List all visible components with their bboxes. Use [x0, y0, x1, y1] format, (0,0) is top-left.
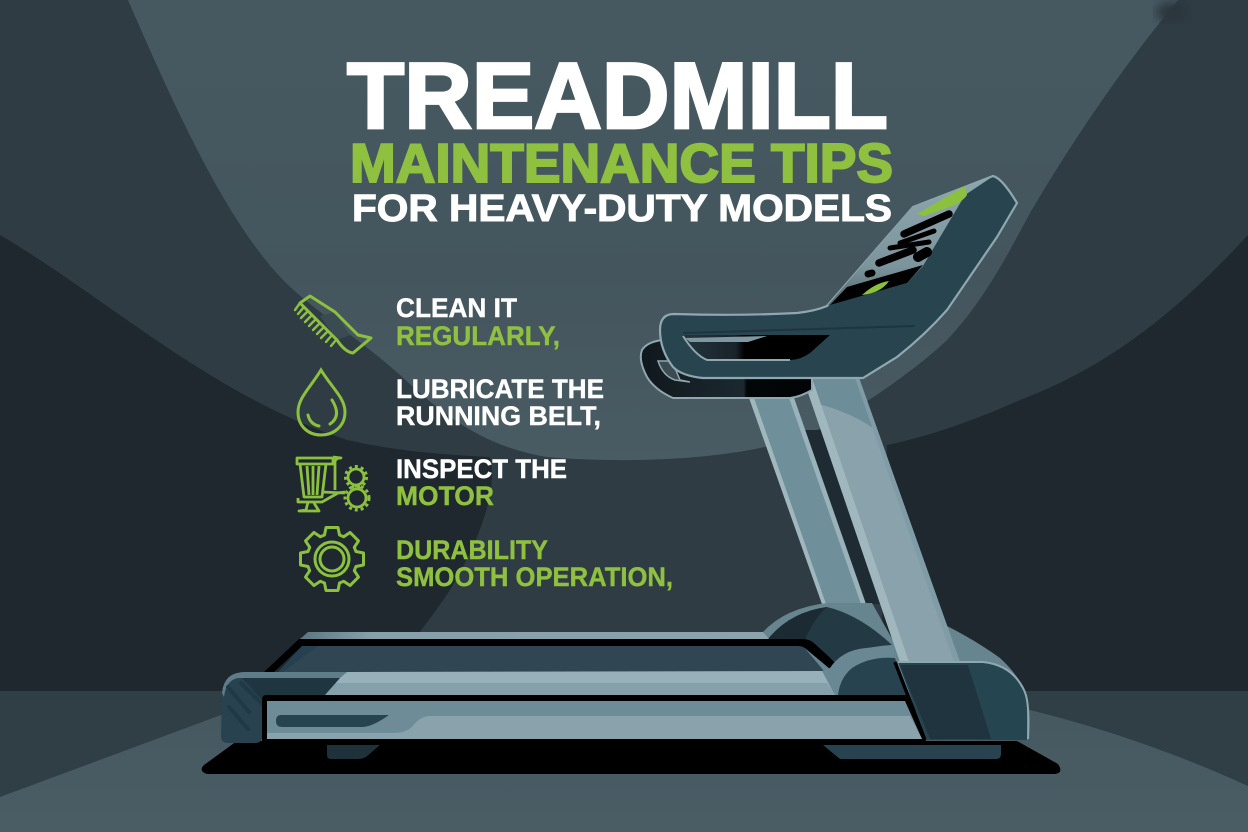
text: clean it regularly: [396, 293, 560, 351]
icon: gear: [300, 528, 364, 590]
running belt: [278, 646, 824, 672]
left foot: [327, 745, 380, 759]
belt black frame: [264, 639, 837, 672]
console face: [828, 177, 992, 305]
text: durability smooth operation: [396, 535, 673, 592]
icon: oil drop: [298, 370, 345, 435]
text: inspect the motor: INSPECT THE: [396, 454, 567, 484]
side rail: [325, 671, 835, 695]
icon: motor and gears: [297, 457, 369, 511]
tip 4: durability: [300, 528, 673, 592]
text: durability smooth operation: SMOOTH OPERATION,: [396, 562, 673, 592]
tip 2: lubricate: [298, 370, 604, 435]
icon: brush: [295, 296, 371, 353]
right foot: [823, 745, 1001, 759]
text: lubricate the running belt: RUNNING BELT,: [396, 401, 601, 431]
text: inspect the motor: [396, 454, 567, 511]
left end cap: [221, 672, 347, 743]
console green lozenge: [862, 281, 889, 295]
text: lubricate the running belt: LUBRICATE THE: [396, 374, 604, 404]
text: inspect the motor: MOTOR: [396, 481, 494, 511]
text: durability smooth operation: DURABILITY: [396, 535, 548, 565]
text: clean it regularly: REGULARLY,: [396, 321, 560, 351]
rear motor cover back: [895, 625, 1028, 740]
handle opening: [683, 335, 830, 360]
rear deck hood: [763, 603, 905, 690]
motor cover: [895, 662, 1028, 740]
lower side panel: [267, 701, 922, 739]
heading: maintenance tips: MAINTENANCE TIPS: [350, 132, 893, 194]
deck top strip: [300, 632, 769, 639]
tip 1: clean: [295, 293, 560, 353]
console screen: [830, 265, 923, 305]
console and front handlebar: [660, 176, 1017, 378]
rear handlebar: [641, 340, 812, 398]
floor: [0, 691, 1248, 832]
console buttons: [868, 214, 949, 274]
treadmill: [202, 176, 1060, 774]
base shadow mat: [202, 741, 1060, 774]
rear upright post: [748, 395, 885, 604]
title: [347, 43, 893, 230]
text: lubricate the running belt: [396, 374, 604, 431]
heading: for heavy-duty models: FOR HEAVY-DUTY MODELS: [352, 188, 892, 230]
tip 3: motor: [297, 454, 567, 511]
black frame under rail: [262, 695, 926, 741]
heading: treadmill: TREADMILL: [347, 43, 888, 148]
motor hood ring: [822, 645, 905, 695]
console green button: [917, 186, 967, 216]
front upright post: [802, 375, 960, 662]
text: clean it regularly: CLEAN IT: [396, 293, 517, 323]
